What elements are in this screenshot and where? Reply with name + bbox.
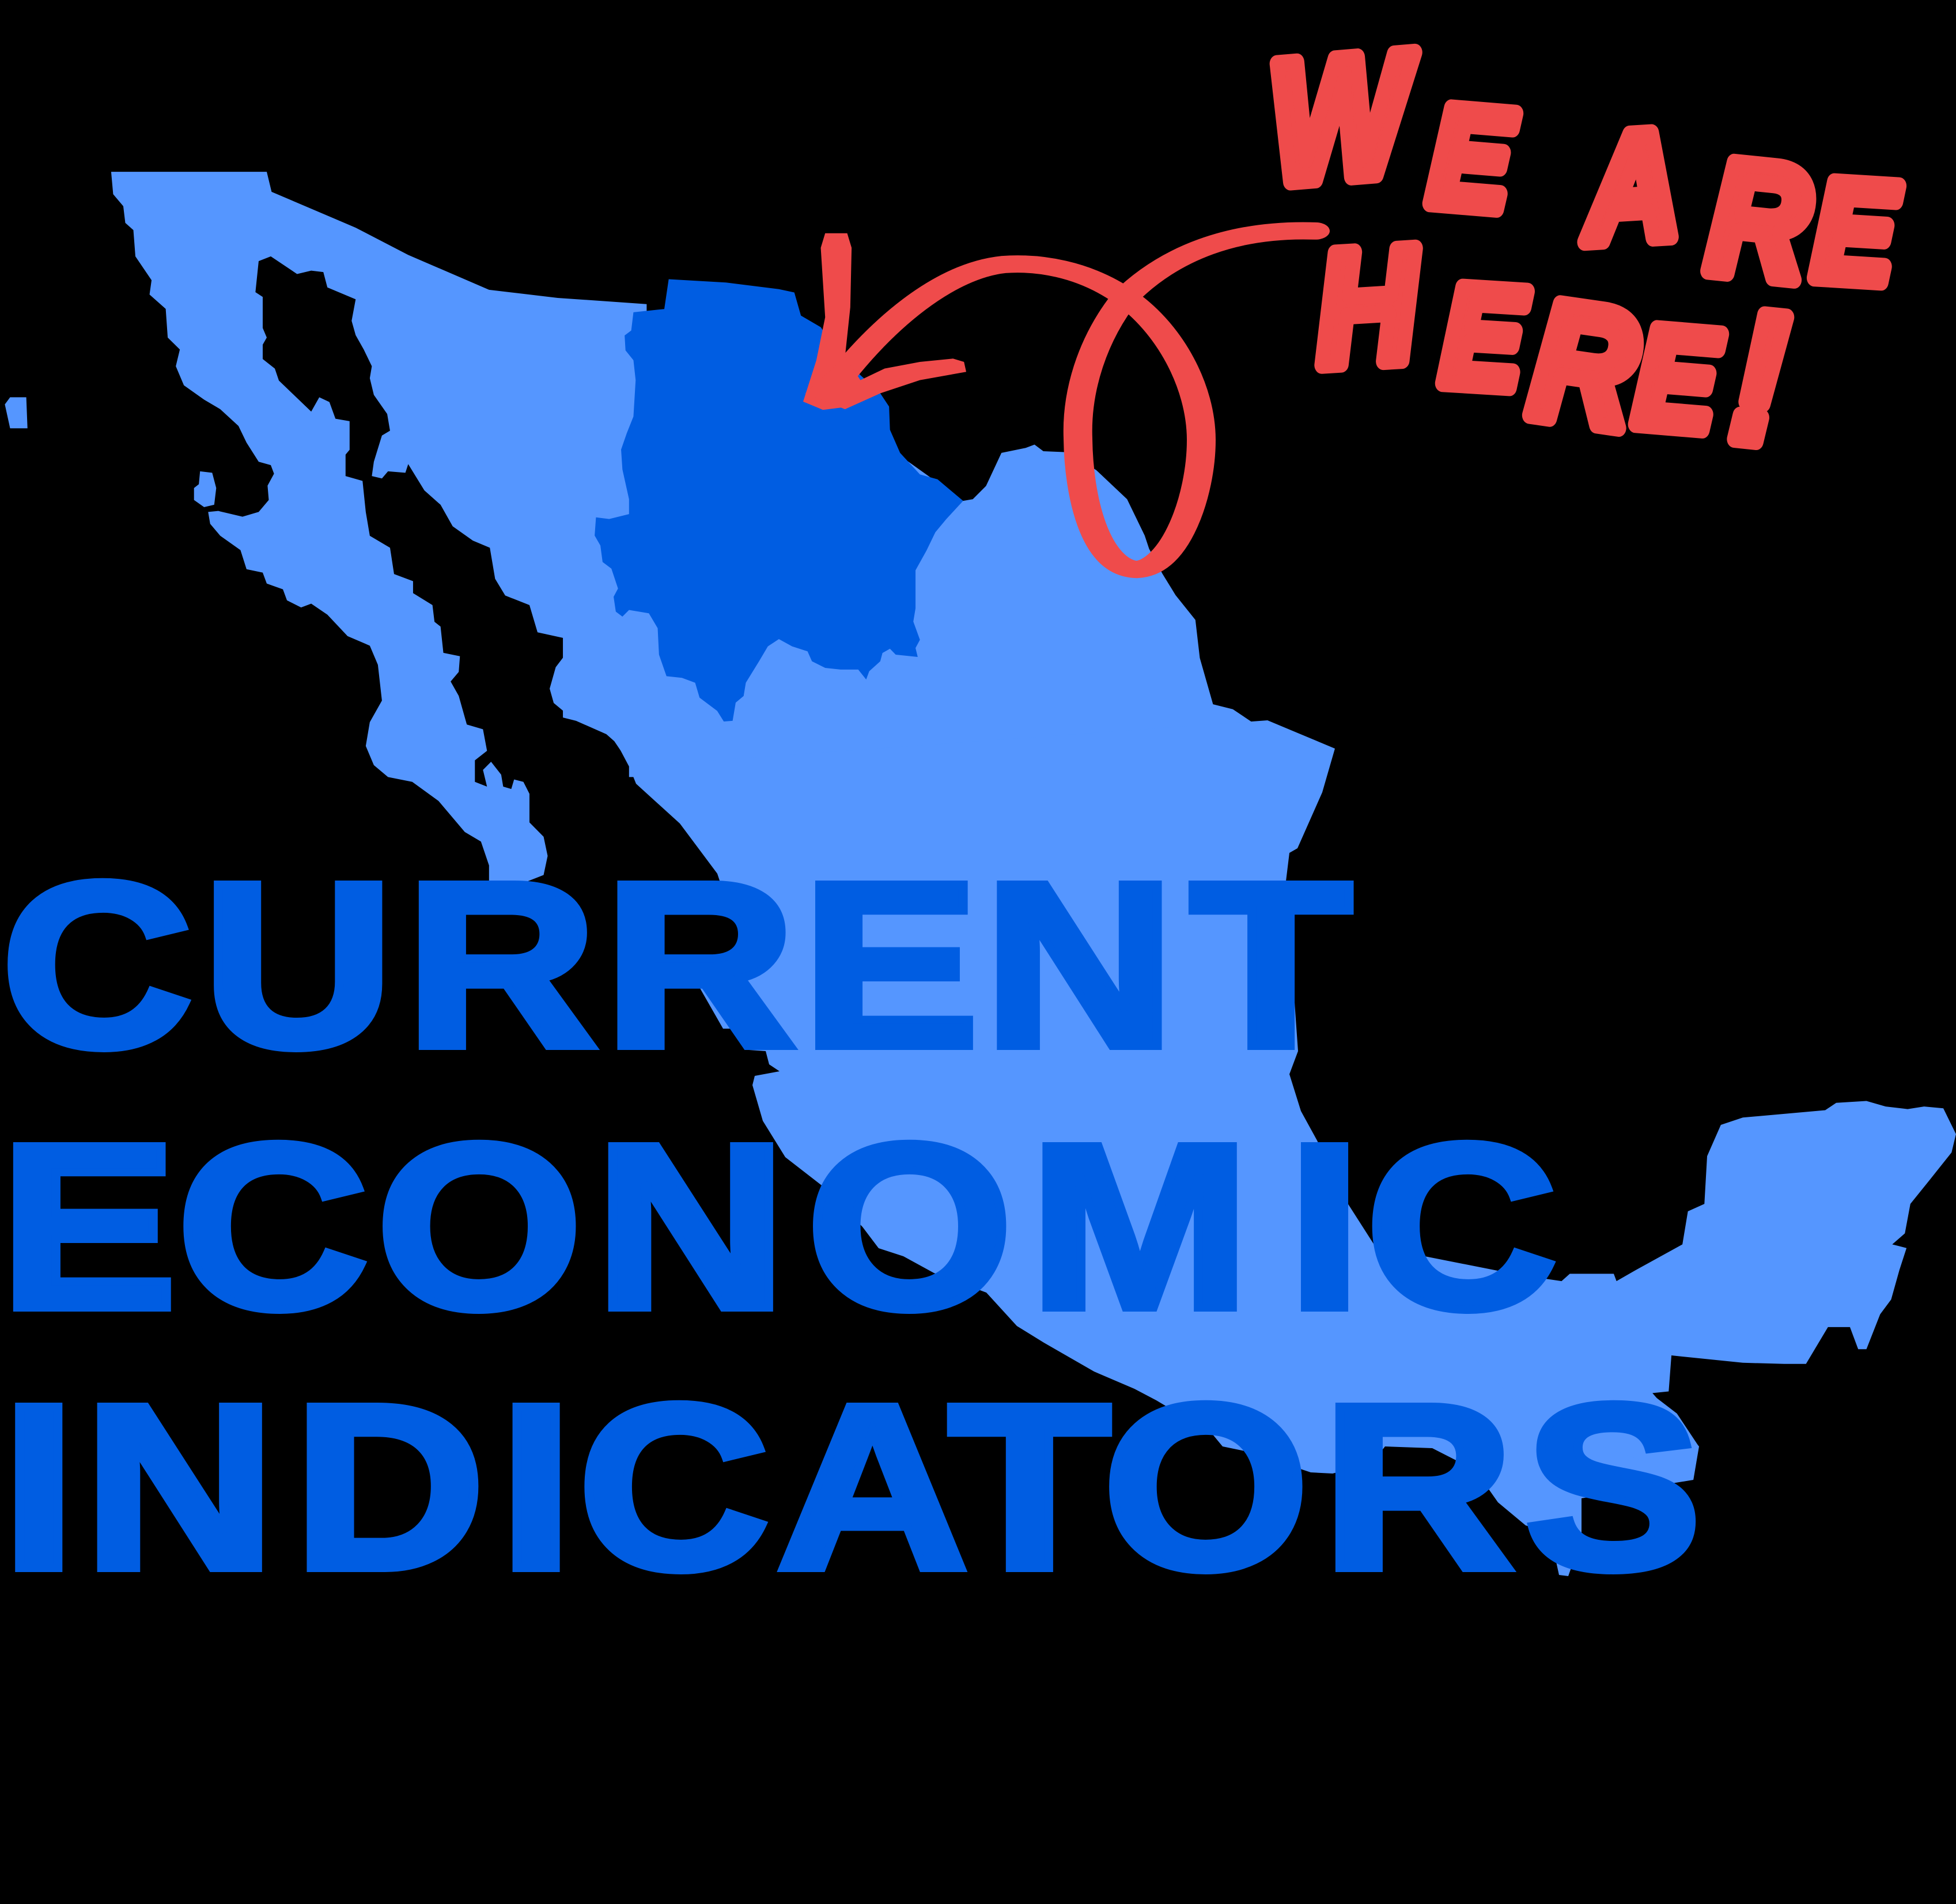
title (0, 834, 1701, 1618)
handwritten note: we are here: ! (1726, 272, 1792, 483)
handwritten note: we are here: E (1426, 77, 1518, 241)
arrow: looping red arrow (803, 231, 1315, 569)
handwritten note: we are here: A (1578, 99, 1682, 275)
handwritten note: we are here: E (1632, 297, 1724, 462)
title: ECONOMIC (0, 1096, 1557, 1358)
map: central Mexico (629, 720, 1699, 1576)
handwritten note: we are here: R (1702, 126, 1815, 316)
map: Yucatan peninsula (1375, 1101, 1956, 1480)
handwritten note: we are here: E (1439, 256, 1529, 419)
handwritten note: we are here: W (1264, 15, 1424, 220)
handwritten note: we are here: H (1313, 214, 1424, 400)
map: north-west and Baja California (5, 172, 646, 882)
map: northern and central body (563, 299, 1281, 777)
handwritten note: we are here (1264, 15, 1901, 483)
title: CURRENT (1, 834, 1352, 1096)
map of Mexico (5, 172, 1956, 1576)
handwritten note: we are here: E (1811, 150, 1901, 313)
map: highlighted state (595, 279, 963, 721)
title: INDICATORS (2, 1357, 1701, 1618)
handwritten note: we are here: R (1523, 265, 1644, 466)
